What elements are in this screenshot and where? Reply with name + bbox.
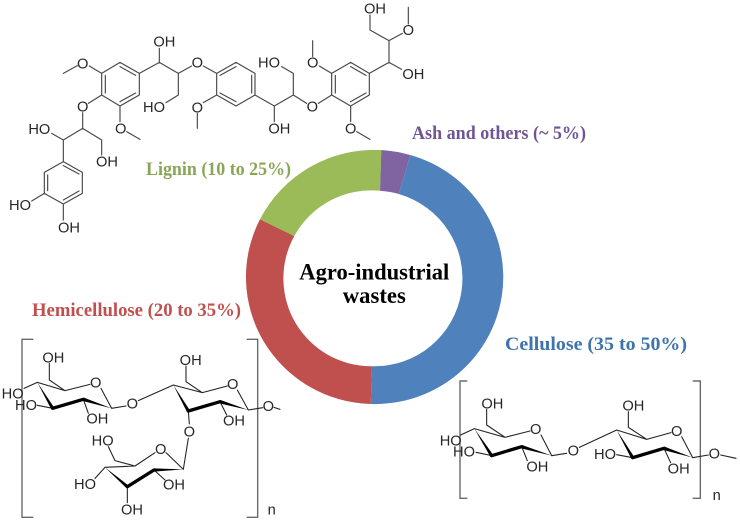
- lignin molecule structure: [9, 1, 424, 236]
- cellulose molecule structure: OH: [668, 462, 690, 478]
- lignin molecule structure: O: [192, 56, 203, 72]
- lignin molecule structure: OH: [268, 121, 290, 137]
- segment: ash and others: [380, 150, 410, 194]
- hemicellulose molecule structure: OH: [163, 478, 185, 494]
- cellulose molecule structure: O: [671, 424, 682, 440]
- lignin molecule structure: OH: [96, 155, 118, 171]
- lignin molecule structure: OH: [402, 67, 424, 83]
- cellulose molecule structure: HO: [594, 447, 616, 463]
- cellulose molecule structure: HO: [440, 433, 462, 449]
- hemicellulose molecule structure: HO: [2, 386, 24, 402]
- lignin molecule structure: O: [307, 56, 318, 72]
- hemicellulose molecule structure: n: [268, 503, 276, 519]
- hemicellulose molecule structure: OH: [223, 414, 245, 430]
- donut centre title: wastes: [343, 283, 406, 308]
- donut chart: composition of agro-industrial wastes: [246, 150, 503, 404]
- hemicellulose molecule structure: OH: [42, 351, 64, 367]
- hemicellulose molecule structure: HO: [92, 434, 114, 450]
- cellulose label: Cellulose (35 to 50%): [505, 335, 687, 355]
- lignin molecule structure: O: [345, 121, 356, 137]
- hemicellulose molecule structure: O: [184, 425, 195, 441]
- hemicellulose label: Hemicellulose (20 to 35%): [32, 301, 241, 321]
- hemicellulose molecule structure: O: [127, 396, 138, 412]
- hemicellulose molecule structure: O: [155, 442, 166, 458]
- cellulose molecule structure: n: [713, 488, 721, 504]
- lignin molecule structure: OH: [364, 1, 386, 17]
- lignin label: Lignin (10 to 25%): [146, 160, 291, 180]
- hemicellulose molecule structure: HO: [15, 398, 37, 414]
- lignin molecule structure: O: [77, 56, 88, 72]
- lignin molecule structure: HO: [9, 198, 31, 214]
- lignin molecule structure: O: [115, 121, 126, 137]
- hemicellulose molecule structure: OH: [86, 412, 108, 428]
- hemicellulose molecule structure: OH: [121, 502, 143, 518]
- hemicellulose molecule structure: HO: [74, 477, 96, 493]
- hemicellulose molecule structure: O: [227, 377, 238, 393]
- segment: hemicellulose: [246, 219, 372, 404]
- cellulose molecule structure: OH: [622, 399, 644, 415]
- lignin molecule structure: O: [192, 100, 203, 116]
- lignin molecule structure: O: [307, 100, 318, 116]
- cellulose molecule structure: O: [709, 446, 720, 462]
- cellulose molecule structure: O: [568, 444, 579, 460]
- hemicellulose molecule structure: O: [90, 375, 101, 391]
- lignin molecule structure: HO: [258, 56, 280, 72]
- segment: cellulose: [371, 155, 503, 404]
- ash and others label: Ash and others (~ 5%): [412, 124, 586, 144]
- lignin molecule structure: O: [77, 100, 88, 116]
- lignin molecule structure: HO: [28, 122, 50, 138]
- cellulose molecule structure: O: [530, 422, 541, 438]
- cellulose molecule structure: HO: [453, 444, 475, 460]
- lignin molecule structure: OH: [153, 34, 175, 50]
- cellulose molecule structure: OH: [481, 396, 503, 412]
- lignin molecule structure: HO: [143, 100, 165, 116]
- donut centre title: Agro-industrial: [299, 260, 449, 284]
- lignin molecule structure: O: [403, 23, 414, 39]
- hemicellulose molecule structure: O: [263, 399, 274, 415]
- cellulose molecule structure: [440, 381, 736, 504]
- cellulose molecule structure: OH: [526, 460, 548, 476]
- segment: lignin: [260, 150, 381, 236]
- hemicellulose molecule structure: [2, 339, 280, 519]
- hemicellulose molecule structure: OH: [180, 353, 202, 369]
- lignin molecule structure: OH: [58, 220, 80, 236]
